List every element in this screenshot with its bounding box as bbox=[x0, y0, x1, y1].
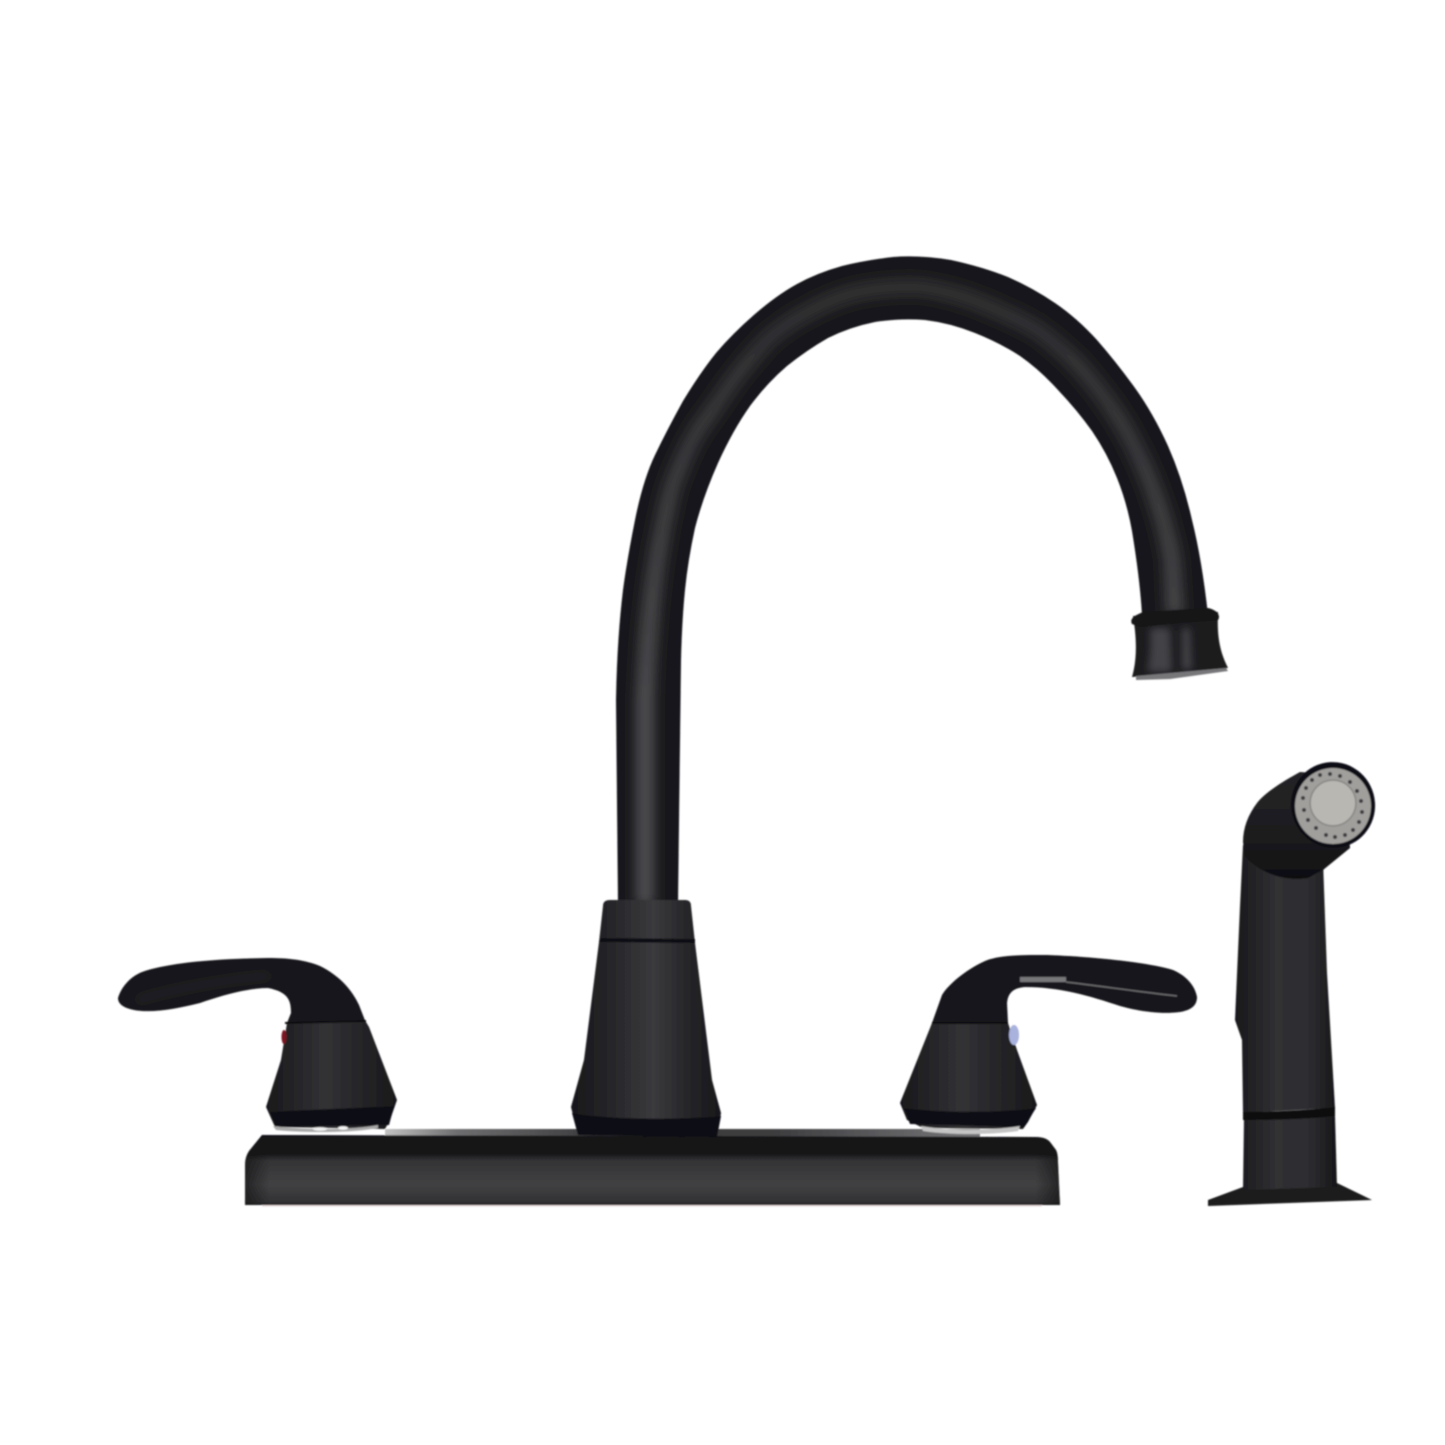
sprayer collar ring bbox=[1243, 1107, 1335, 1120]
sprayer head bbox=[1243, 772, 1350, 879]
hot indicator bbox=[282, 1030, 286, 1044]
left lever bbox=[118, 958, 366, 1023]
cold indicator bbox=[1009, 1025, 1019, 1045]
spray holes bbox=[1301, 772, 1364, 839]
sprayer face bbox=[1281, 753, 1385, 857]
deck plate bbox=[245, 1129, 1060, 1206]
sprayer body bbox=[1235, 845, 1335, 1113]
central column bbox=[571, 900, 721, 1137]
left handle bbox=[118, 958, 397, 1132]
spout tip and aerator bbox=[1131, 608, 1228, 680]
spout bbox=[616, 256, 1208, 905]
right collar bbox=[900, 1023, 1037, 1129]
illustration: matte black kitchen faucet with side sprayer bbox=[117, 255, 1376, 1207]
right lever bbox=[932, 955, 1197, 1023]
sprayer flange bbox=[1208, 1183, 1372, 1206]
right handle bbox=[900, 955, 1197, 1134]
right ring bbox=[921, 1126, 1020, 1134]
sprayer base bbox=[1243, 1116, 1337, 1190]
left ring bbox=[273, 1125, 378, 1132]
side sprayer bbox=[1208, 753, 1385, 1206]
faucet assembly bbox=[118, 256, 1385, 1206]
left collar bbox=[266, 1022, 397, 1129]
